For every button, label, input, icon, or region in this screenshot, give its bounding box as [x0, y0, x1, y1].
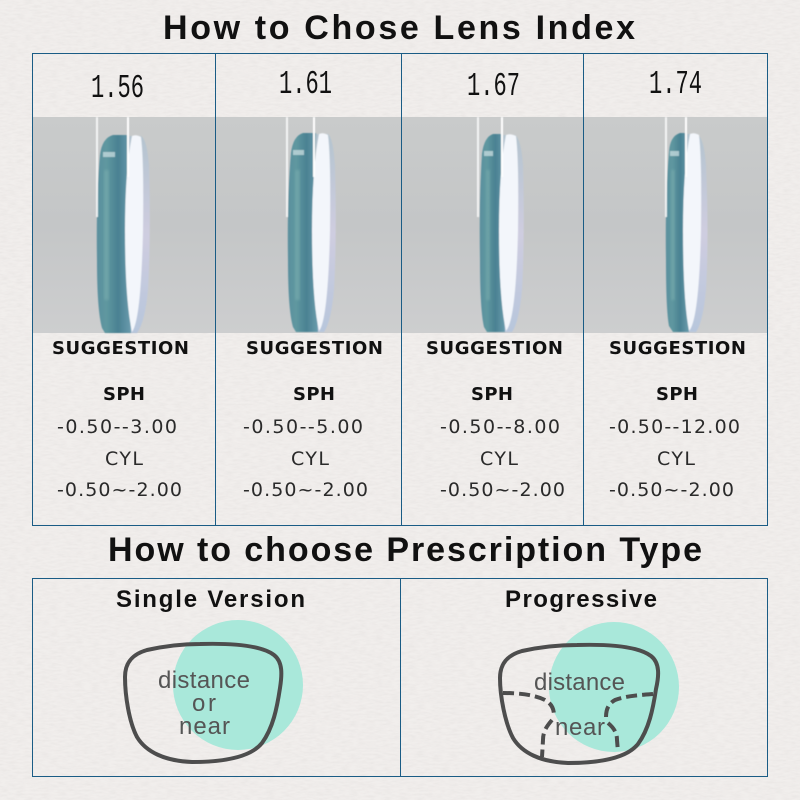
suggestion text 1.56: SUGGESTION — [52, 338, 189, 359]
lens 1.61 — [286, 117, 336, 332]
index label 1.67: 1.67 — [467, 68, 520, 105]
table grid lines — [32, 54, 768, 526]
label: near: near — [555, 714, 605, 741]
suggestion text 1.67: -0.50--8.00 — [440, 416, 560, 438]
lens 1.56 — [96, 117, 150, 333]
suggestion text 1.67: SUGGESTION — [426, 338, 563, 359]
icon: lens frame — [125, 644, 281, 762]
suggestion text 1.67: -0.50~-2.00 — [440, 479, 565, 501]
single version column — [116, 586, 305, 762]
title: How to Chose Lens Index — [163, 9, 635, 47]
suggestion text 1.56: -0.50~-2.00 — [57, 479, 182, 501]
subheading: progressive: Progressive — [505, 586, 657, 613]
column: index 1.61 — [243, 66, 383, 501]
panel: lens index comparison — [32, 54, 768, 526]
suggestion text 1.61: SPH — [293, 384, 335, 405]
suggestion text 1.61: -0.50~-2.00 — [243, 479, 368, 501]
suggestion text 1.67: SPH — [471, 384, 513, 405]
suggestion text 1.74: CYL — [657, 448, 695, 470]
label: distance or near — [158, 667, 250, 740]
suggestion text 1.67 — [426, 338, 565, 501]
grid lines — [32, 578, 768, 776]
icon: lens frame — [500, 645, 658, 763]
suggestion text 1.56 — [52, 338, 189, 501]
index label 1.56: 1.56 — [91, 70, 144, 107]
column: index 1.67 — [426, 68, 565, 501]
suggestion text 1.56: -0.50--3.00 — [57, 416, 177, 438]
icon: mint circle — [173, 620, 303, 750]
lens 1.74 — [665, 117, 708, 332]
label: distance: distance — [534, 669, 625, 696]
suggestion text 1.61: -0.50--5.00 — [243, 416, 363, 438]
label: distance or near: near — [179, 713, 230, 740]
column: index 1.74 — [609, 66, 746, 501]
gray lens photo band — [33, 117, 767, 333]
suggestion text 1.74: SPH — [656, 384, 698, 405]
icon: mint circle — [549, 622, 679, 752]
suggestion text 1.74: -0.50~-2.00 — [609, 479, 734, 501]
suggestion text 1.74: -0.50--12.00 — [609, 416, 740, 438]
section heading: prescription type: How to choose Prescription Type — [108, 531, 702, 569]
suggestion text 1.61: CYL — [291, 448, 329, 470]
label: distance or near: or — [192, 690, 216, 717]
suggestion text 1.67: CYL — [480, 448, 518, 470]
column: index 1.56 — [52, 70, 189, 501]
panel: prescription type comparison — [32, 578, 768, 776]
suggestion text 1.61: SUGGESTION — [246, 338, 383, 359]
suggestion text 1.74: SUGGESTION — [609, 338, 746, 359]
icon: dashed progressive zones — [503, 693, 653, 757]
suggestion text 1.56: SPH — [103, 384, 145, 405]
suggestion text 1.74 — [609, 338, 746, 501]
label: distance or near: distance — [158, 667, 250, 694]
suggestion text 1.56: CYL — [105, 448, 143, 470]
index label 1.74: 1.74 — [649, 66, 702, 103]
progressive column — [500, 586, 679, 763]
lens 1.67 — [477, 117, 524, 332]
subheading: single version: Single Version — [116, 586, 305, 613]
index label 1.61: 1.61 — [279, 66, 332, 103]
suggestion text 1.61 — [243, 338, 383, 501]
